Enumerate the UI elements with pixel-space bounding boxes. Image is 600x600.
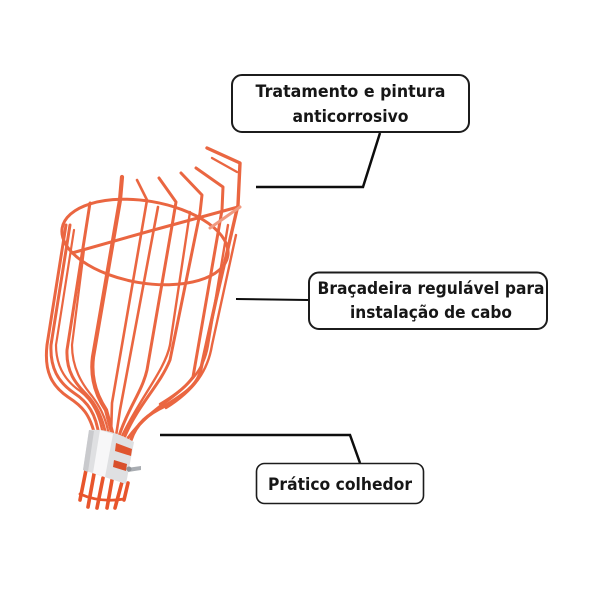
callout: treatment and paint <box>232 75 469 132</box>
callout: adjustable clamp: Braçadeira regulável para <box>318 279 544 299</box>
callout: treatment and paint: Tratamento e pintura <box>256 82 446 102</box>
callout: adjustable clamp: instalação de cabo <box>350 303 512 323</box>
connector: middle callout <box>236 299 308 300</box>
lower cage below clamp <box>80 470 128 508</box>
callout: practical picker <box>256 464 424 504</box>
connector: bottom callout <box>160 435 360 463</box>
cross bar <box>72 207 238 253</box>
callout: treatment and paint: anticorrosivo <box>292 107 408 127</box>
connector: top callout <box>256 133 380 187</box>
callout: adjustable clamp <box>309 272 547 329</box>
callout: practical picker: Prático colhedor <box>268 475 413 495</box>
metal clamp <box>83 430 141 484</box>
product illustration: fruit picker basket <box>46 148 240 508</box>
basket wires <box>46 148 240 440</box>
rim ring <box>55 188 235 296</box>
